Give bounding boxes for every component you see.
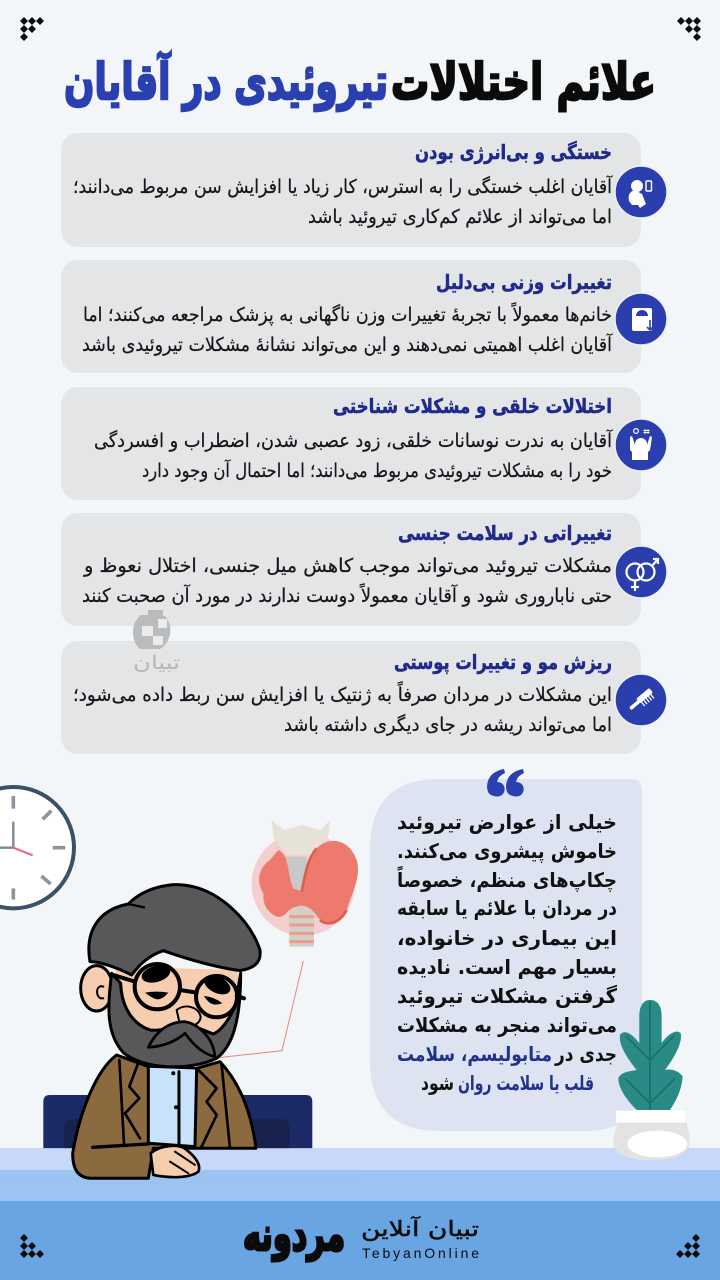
glasses	[113, 964, 244, 1017]
text: quote: قلب یا سلامت روان	[458, 1071, 594, 1095]
nose	[177, 1007, 201, 1027]
hand	[151, 1146, 199, 1177]
heading: fatigue: خستگی و بی‌انرژی بودن	[415, 140, 612, 164]
text: fatigue: آقایان اغلب خستگی را به استرس، کار زیاد یا افزایش سن مربوط می‌دانند؛	[73, 174, 613, 198]
text: quote: متابولیسم، سلامت	[397, 1042, 552, 1066]
eyes	[140, 962, 172, 986]
text: sexual health: مشکلات تیروئید می‌تواند موجب کاهش میل جنسی، اختلال نعوظ و	[83, 555, 612, 577]
mustache	[148, 1022, 215, 1057]
text: hair and skin: این مشکلات در مردان صرفاً به ژنتیک یا افزایش سن ربط داده می‌شود؛	[73, 681, 612, 706]
footer logo: mardooneh: مردونه	[243, 1207, 345, 1261]
plant	[613, 1000, 690, 1160]
text: quote: می‌تواند منجر به مشکلات	[397, 1013, 617, 1037]
corner mark: bottom left	[20, 1234, 44, 1258]
icon: gender symbols	[615, 546, 667, 598]
ear	[81, 966, 113, 1011]
clock	[0, 787, 74, 908]
heading: weight changes: تغییرات وزنی بی‌دلیل	[436, 270, 612, 294]
text: weight changes: آقایان اغلب اهمیتی نمی‌دهند و این می‌تواند نشانهٔ مشکلات تیروئیدی باشد	[82, 332, 613, 356]
icon: tired person	[615, 166, 667, 218]
text: weight changes: خانم‌ها معمولاً با تجربهٔ تغییرات وزن ناگهانی به پزشک مراجعه می‌کنند؛ اما	[83, 302, 612, 326]
text: quote: این بیماری در خانواده،	[397, 926, 617, 950]
icon: stressed person	[615, 419, 667, 471]
panel: quote	[370, 769, 642, 1131]
heading: sexual health: تغییراتی در سلامت جنسی	[398, 521, 612, 545]
panel: hair and skin	[61, 641, 667, 754]
text: mood disorders	[94, 428, 613, 482]
watermark	[133, 610, 180, 674]
text: quote: خاموش پیشروی می‌کنند.	[397, 839, 617, 864]
corner mark: bottom right	[676, 1234, 700, 1258]
jacket	[73, 1055, 256, 1178]
text: quote: چکاپ‌های منظم، خصوصاً	[397, 866, 617, 893]
text: quote: گرفتن مشکلات تیروئید	[397, 984, 617, 1008]
text: fatigue: اما می‌تواند از علائم کم‌کاری تیروئید باشد	[308, 206, 612, 228]
face	[115, 967, 238, 1037]
text: weight changes	[82, 302, 613, 356]
title: تیروئیدی در آقایان	[64, 51, 388, 112]
text: hair and skin	[73, 681, 612, 736]
text: quote	[397, 810, 617, 1095]
chair	[43, 1095, 312, 1148]
text: quote: خیلی از عوارض تیروئید	[397, 810, 617, 834]
corner mark: top left	[20, 17, 44, 41]
text: quote: بسیار مهم است. نادیده	[397, 955, 617, 979]
footer logo: tebyan online: تبیان آنلاین	[361, 1216, 479, 1241]
hair	[89, 885, 260, 975]
corner mark: top right	[677, 17, 701, 41]
beard	[109, 973, 241, 1067]
icon: comb	[615, 674, 667, 726]
thyroid illustration	[218, 820, 358, 1058]
icon: quotation marks	[487, 769, 524, 796]
watermark: تبیان	[133, 652, 180, 674]
panel: mood disorders	[61, 387, 667, 500]
character: tired man at desk	[0, 885, 360, 1180]
footer logo: tebyan online: TebyanOnline	[362, 1245, 480, 1261]
panel: sexual health	[61, 513, 667, 626]
text: sexual health	[82, 555, 612, 607]
icon: weighing scale	[615, 293, 667, 345]
text: mood disorders: خود را به مشکلات تیروئیدی مربوط می‌دانند؛ اما احتمال آن وجود دارد	[142, 458, 612, 482]
heading: mood disorders: اختلالات خلقی و مشکلات شناختی	[333, 394, 612, 418]
heading: hair and skin: ریزش مو و تغییرات پوستی	[394, 650, 612, 675]
panel: fatigue	[61, 133, 667, 247]
text: quote: جدی در	[554, 1042, 617, 1066]
panel: weight changes	[61, 260, 667, 373]
text: sexual health: حتی ناباروری شود و آقایان معمولاً دوست ندارند در مورد آن صحبت کنند	[82, 583, 612, 607]
ground	[0, 1148, 720, 1280]
shirt	[148, 1067, 197, 1148]
text: quote: در مردان با علائم یا سابقه	[397, 896, 617, 920]
text: mood disorders: آقایان به ندرت نوسانات خلقی، زود عصبی شدن، اضطراب و افسردگی	[94, 428, 613, 452]
text: hair and skin: اما می‌تواند ریشه در جای دیگری داشته باشد	[284, 713, 612, 736]
footer logo: tebyan online	[361, 1216, 480, 1261]
desk top over chair	[0, 1148, 360, 1170]
text: fatigue	[73, 174, 613, 228]
text: quote: شود	[421, 1071, 454, 1095]
